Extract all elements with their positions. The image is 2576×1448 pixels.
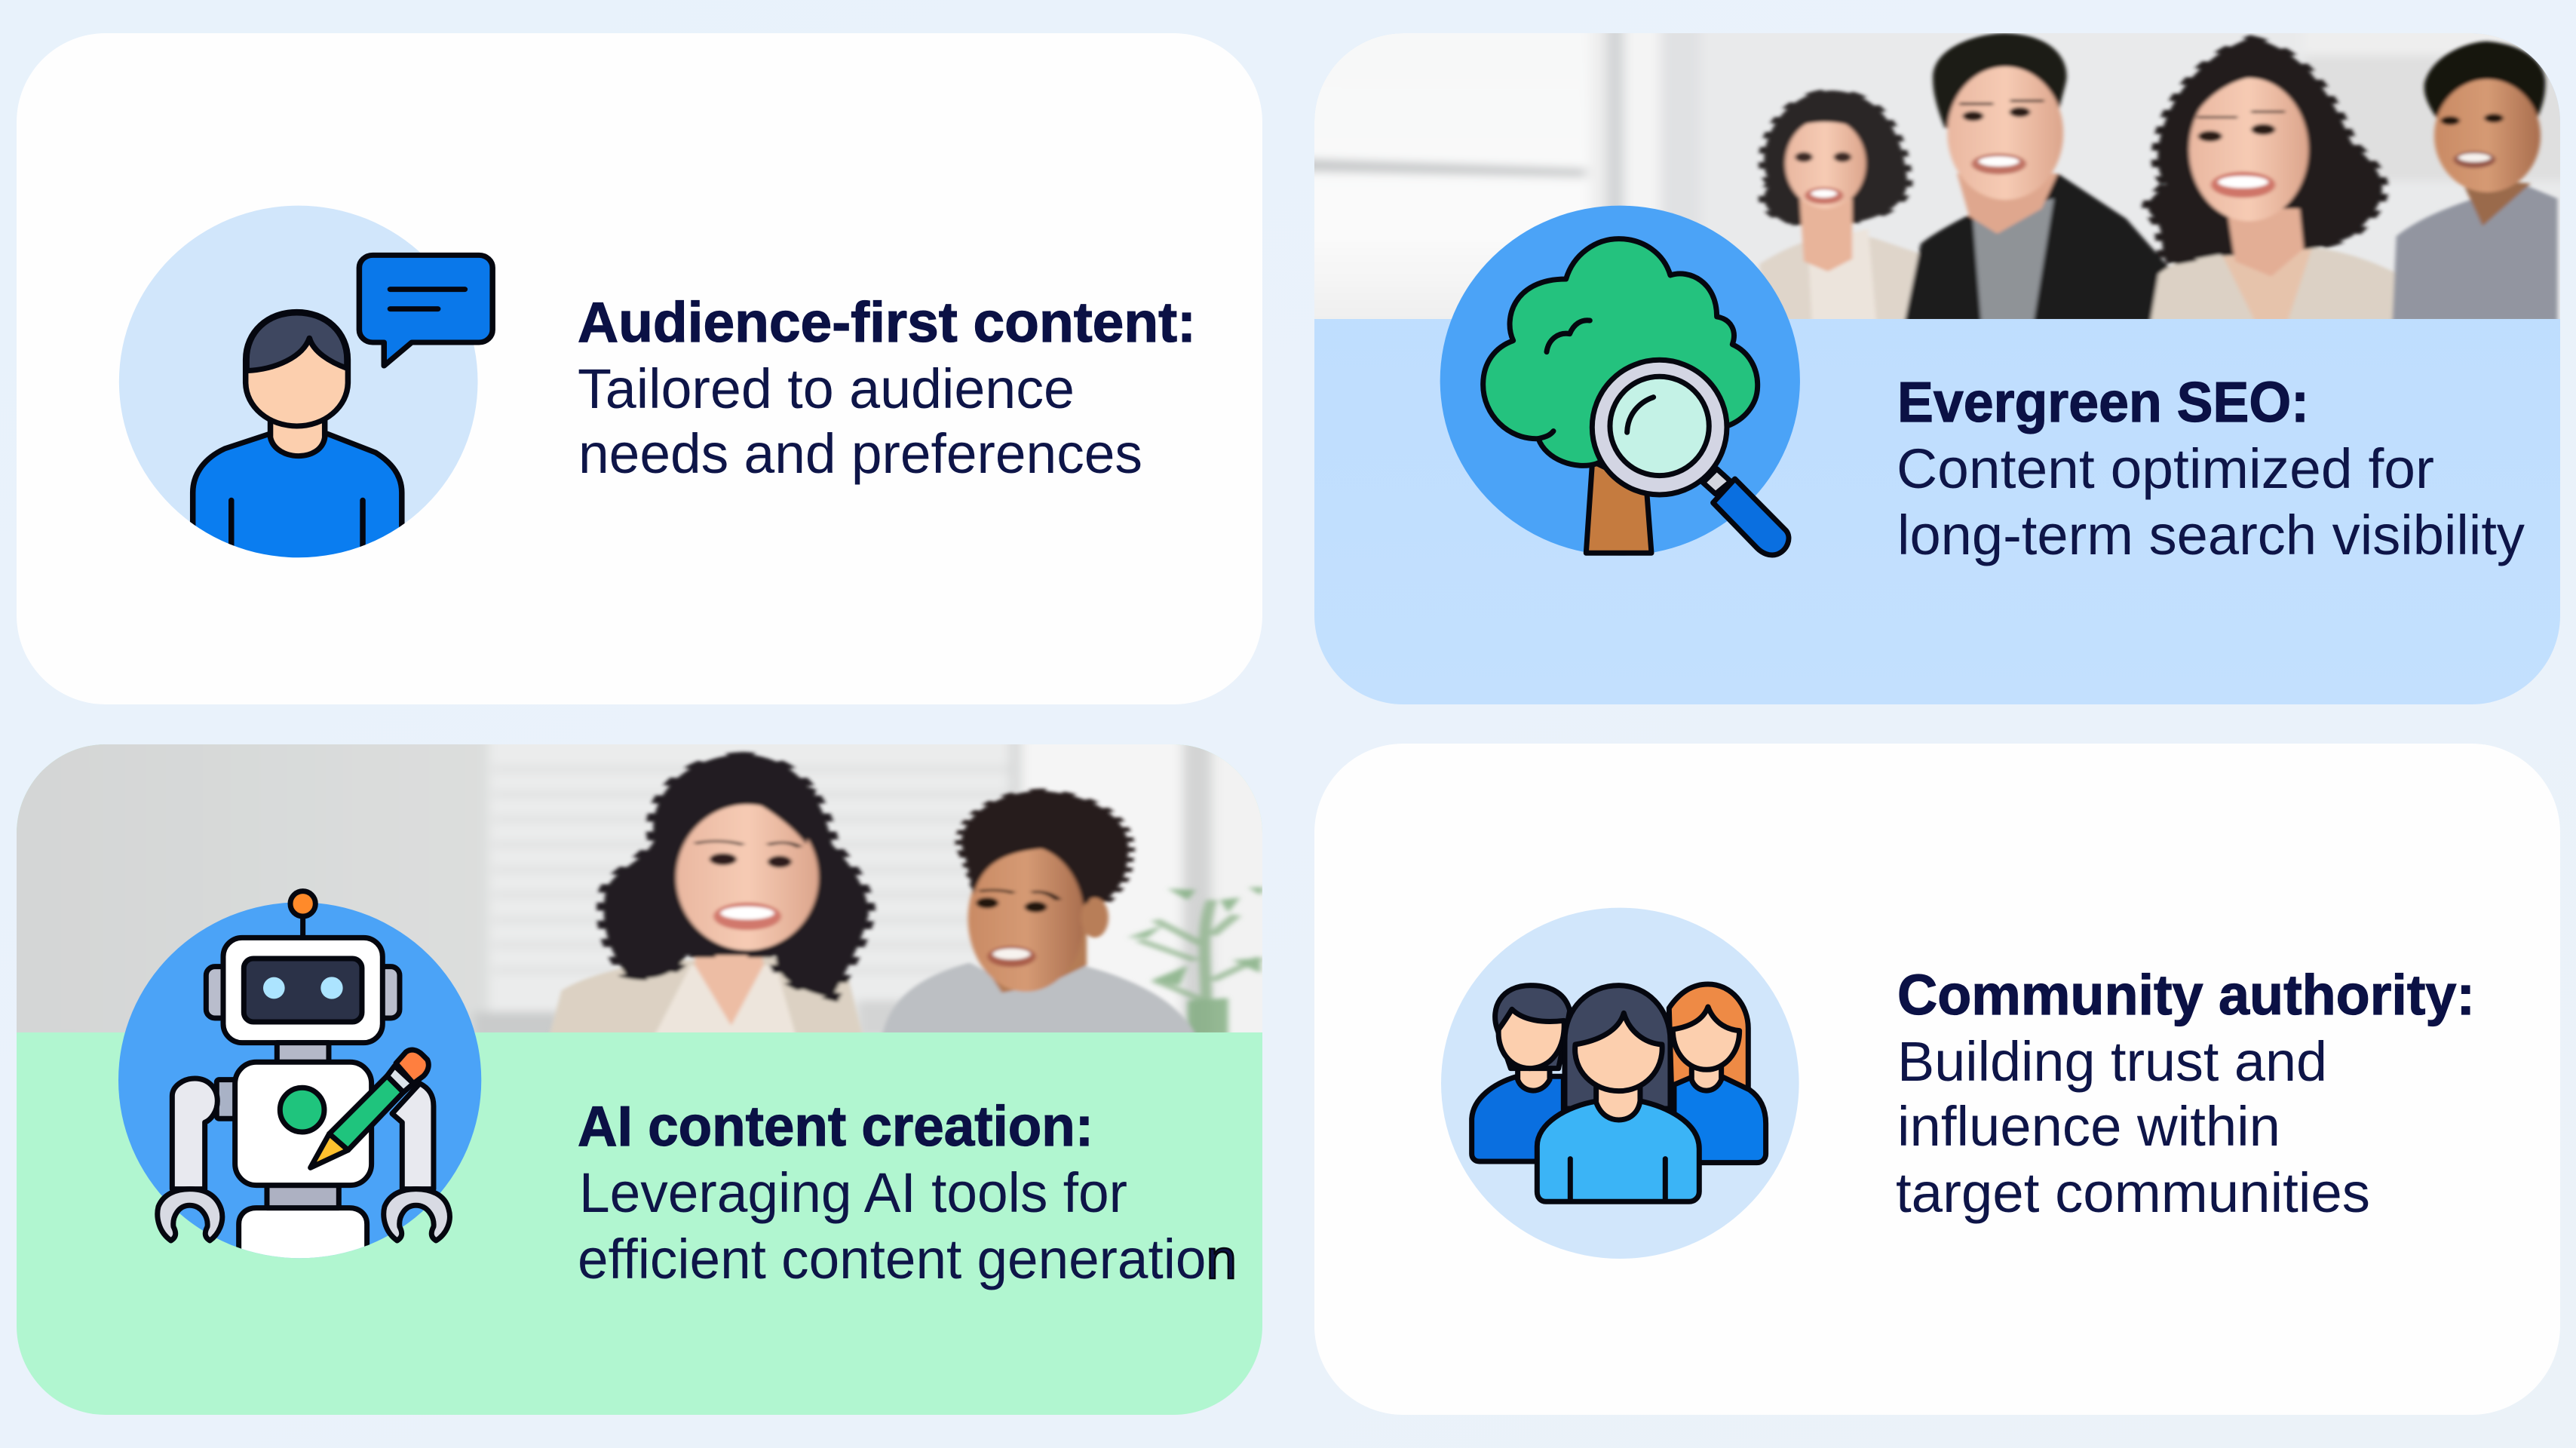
right person: [1669, 984, 1766, 1163]
icon: person with speech bubble: [119, 206, 492, 571]
woman left: [1759, 235, 1921, 322]
text: evergreen SEO: Evergreen SEO:: [1897, 370, 2309, 434]
text: AI content creation: Leveraging AI tools for: [579, 1161, 1127, 1224]
text: audience-first content: Tailored to audience: [578, 357, 1075, 420]
text: community authority: Building trust and: [1897, 1030, 2327, 1093]
text: AI content creation: [578, 1094, 1237, 1290]
left person: [1472, 986, 1570, 1161]
text: community authority: [1896, 963, 2475, 1224]
card background: [1314, 744, 2560, 1415]
text: AI content creation: AI content creation:: [578, 1094, 1093, 1158]
text: evergreen SEO: [1897, 370, 2525, 566]
panel: audience-first content: [17, 33, 1262, 704]
icon: robot with pencil: [118, 891, 481, 1267]
text: AI content creation: efficient content generation: [578, 1228, 1237, 1290]
card background: [1314, 33, 2560, 704]
text: community authority: target communities: [1896, 1161, 2370, 1224]
text: audience-first content: [578, 290, 1196, 485]
photo: team of four: [1296, 23, 2576, 330]
panel: evergreen SEO: [1296, 23, 2576, 704]
text: evergreen SEO: long-term search visibility: [1897, 504, 2525, 566]
text: community authority: Community authority:: [1897, 963, 2475, 1026]
icon: tree with magnifying glass: [1440, 206, 1800, 556]
text: community authority: influence within: [1897, 1095, 2280, 1158]
card background: [17, 33, 1262, 704]
text: audience-first content: needs and preferences: [578, 422, 1142, 485]
woman: [550, 956, 863, 1035]
man centre: [1905, 173, 2170, 322]
photo: two colleagues: [0, 734, 1293, 1041]
woman right: [2151, 246, 2424, 322]
man right: [2392, 183, 2557, 322]
text: evergreen SEO: Content optimized for: [1897, 437, 2434, 500]
plant: [1127, 888, 1265, 1035]
text: audience-first content: Audience-first content:: [578, 290, 1196, 354]
panel: AI content creation: [0, 734, 1293, 1415]
centre person: [1537, 986, 1699, 1201]
icon: three community members: [1441, 908, 1799, 1259]
boy: [882, 963, 1196, 1035]
card background: [17, 744, 1262, 1415]
panel: community authority: [1314, 744, 2560, 1415]
